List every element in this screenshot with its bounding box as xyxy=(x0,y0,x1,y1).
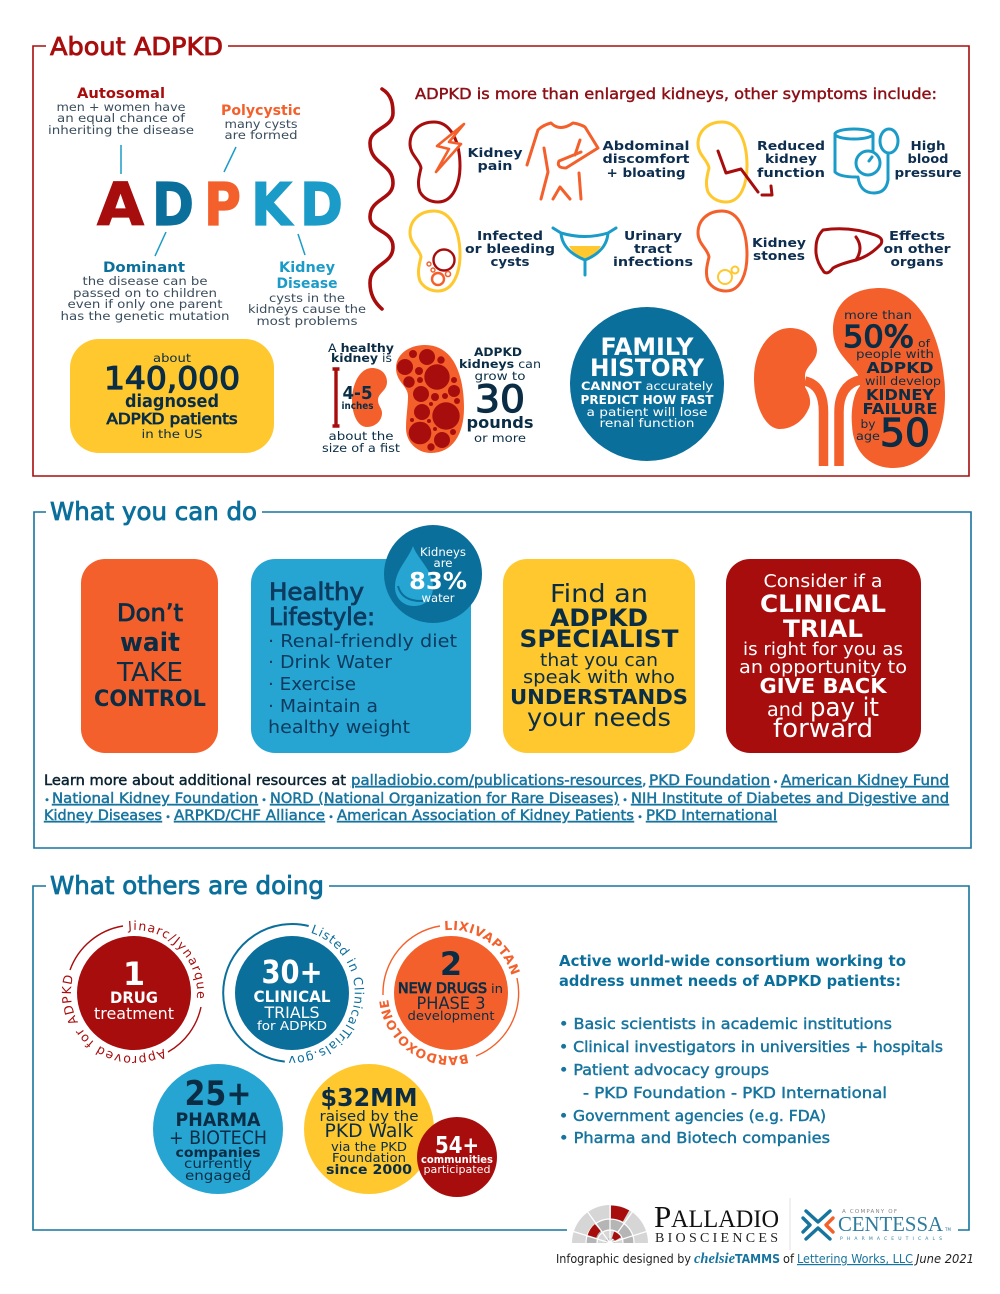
healthy kidney size: kidney is xyxy=(331,351,392,365)
kidneys illustration: 50% failure: KIDNEY xyxy=(866,386,935,404)
logo: Centessa: TM xyxy=(944,1227,951,1232)
label: Kidney stones: Kidney xyxy=(752,235,806,250)
text block: Autosomal: men + women have xyxy=(56,100,186,114)
card: Healthy Lifestyle xyxy=(251,559,471,753)
resource links: PKD International xyxy=(646,808,777,824)
healthy kidney size: size of a fist xyxy=(322,441,401,455)
card: Find an ADPKD specialist: Find an xyxy=(550,579,648,608)
text block: Dominant: Dominant xyxy=(103,260,185,276)
label: Reduced kidney function xyxy=(757,138,825,180)
card: Consider a clinical trial: CLINICAL xyxy=(760,590,886,618)
kidneys illustration: 50% failure: 50 xyxy=(880,411,930,455)
card: Consider a clinical trial: is right for you as xyxy=(743,640,903,660)
icon: abdominal torso xyxy=(527,123,598,199)
card: Find an ADPKD specialist: speak with who xyxy=(523,667,675,688)
badge: 25+ pharma and biotech: 25+ xyxy=(184,1074,252,1114)
resource links xyxy=(44,773,949,824)
text block: Dominant: has the genetic mutation xyxy=(60,309,230,323)
resource links: National Kidney Foundation xyxy=(52,791,258,807)
healthy kidney size xyxy=(322,341,401,455)
badge: 2 new drugs: development xyxy=(408,1008,495,1023)
kidneys illustration: 50% failure: ADPKD xyxy=(866,359,934,377)
badge: 2 new drugs: BARDOXOLONE xyxy=(379,1000,468,1066)
card: Consider a clinical trial: Consider if a xyxy=(764,572,882,592)
label: Effects on other organs: Effects xyxy=(889,228,945,243)
healthy kidney size: A healthy xyxy=(328,341,395,355)
icon: bladder xyxy=(553,228,616,275)
badge: 1 drug treatment xyxy=(62,920,204,1063)
logo: Palladio Biosciences: ALLADIO xyxy=(671,1206,779,1233)
card: Healthy Lifestyle: healthy weight xyxy=(268,717,410,738)
healthy kidney size: inches xyxy=(342,401,374,412)
badge: 30+ clinical trials xyxy=(222,923,364,1063)
card: Find an ADPKD specialist: that you can xyxy=(540,650,658,671)
resource links: American Association of Kidney Patients xyxy=(337,808,634,824)
text: ADPKD kidneys 30 pounds: kidneys can xyxy=(459,357,541,371)
badge: 25+ pharma and biotech: companies xyxy=(176,1146,261,1161)
callout: 140,000 patients: ADPKD patients xyxy=(106,410,238,428)
badge: 30+ clinical trials: CLINICAL xyxy=(254,987,330,1006)
callout: family history xyxy=(570,307,724,461)
card: Don't wait: TAKE xyxy=(116,658,183,688)
badge: kidneys are 83% water: 83% xyxy=(409,569,467,595)
card: Healthy Lifestyle: · Drink Water xyxy=(268,652,393,673)
designer credit: of xyxy=(783,1252,795,1266)
label: Urinary tract infections: infections xyxy=(613,254,693,269)
badge: 2 new drugs: PHASE 3 xyxy=(416,994,486,1014)
label: Kidney pain: Kidney xyxy=(468,145,522,160)
resource links: American Kidney Fund xyxy=(781,773,949,789)
resource links: • xyxy=(261,796,267,806)
callout: family history: FAMILY xyxy=(600,333,694,361)
resource links: • xyxy=(328,813,334,823)
label: Abdominal discomfort + bloating xyxy=(602,138,690,180)
card: Consider a clinical trial xyxy=(726,559,921,753)
designer credit: chelsie xyxy=(694,1251,735,1267)
text block: Dominant: even if only one parent xyxy=(68,297,223,311)
consortium list: - PKD Foundation - PKD International xyxy=(583,1084,887,1102)
text: ADPKD kidneys 30 pounds: or more xyxy=(474,431,526,445)
card: Consider a clinical trial: and xyxy=(767,699,803,721)
badge: kidneys are 83% water: water xyxy=(422,591,455,605)
kidneys illustration: 50% failure: more than xyxy=(844,308,912,322)
label: Effects on other organs: on other xyxy=(884,241,951,256)
badge: 30+ clinical trials: TRIALS xyxy=(264,1003,320,1022)
resource links: NORD (National Organization for Rare Diseases) xyxy=(270,791,619,807)
badge: 54+ communities xyxy=(417,1117,497,1197)
label: Infected or bleeding cysts: cysts xyxy=(490,254,530,269)
label: High blood pressure xyxy=(894,138,962,180)
card: Consider a clinical trial: GIVE BACK xyxy=(760,674,888,698)
callout: 140,000 patients: 140,000 xyxy=(104,361,240,397)
badge: kidneys are 83% water xyxy=(384,525,482,623)
label: Abdominal discomfort + bloating: + bloating xyxy=(606,165,686,180)
card: Healthy Lifestyle: · Exercise xyxy=(268,674,356,695)
designer credit: TAMMS xyxy=(735,1252,780,1266)
heading: What others are doing: What others are doing xyxy=(50,871,324,900)
panel: About ADPKD xyxy=(33,32,969,476)
ADPKD wordmark xyxy=(97,170,343,239)
badge: 30+ clinical trials: 30+ xyxy=(262,953,322,991)
label: Abdominal discomfort + bloating: discomfort xyxy=(602,151,690,166)
kidneys illustration: 50% failure xyxy=(754,288,945,468)
label: Kidney pain xyxy=(468,145,522,173)
badge: $32MM PKD Walk: since 2000 xyxy=(326,1163,412,1178)
kidneys illustration: 50% failure: 50% xyxy=(843,320,914,355)
consortium heading: Active world-wide consortium working to xyxy=(559,952,906,970)
text block: Polycystic: many cysts xyxy=(224,117,298,131)
label: Reduced kidney function: Reduced xyxy=(757,138,825,153)
ADPKD wordmark: A xyxy=(97,170,144,239)
text block: Polycystic: Polycystic xyxy=(221,103,301,119)
icon: kidney pain xyxy=(410,122,464,202)
text: ADPKD kidneys 30 pounds: pounds xyxy=(466,413,534,432)
badge: $32MM PKD Walk: via the PKD xyxy=(331,1139,407,1154)
text block: Autosomal: Autosomal xyxy=(77,86,165,102)
badge: $32MM PKD Walk: PKD Walk xyxy=(324,1120,414,1142)
text block: Dominant: the disease can be xyxy=(82,274,208,288)
badge: $32MM PKD Walk: raised by the xyxy=(320,1109,418,1125)
kidneys illustration: 50% failure: people with xyxy=(856,347,934,361)
resource links: • xyxy=(637,813,643,823)
resource links: • xyxy=(165,813,171,823)
label: Urinary tract infections xyxy=(613,228,693,269)
consortium list: • Government agencies (e.g. FDA) xyxy=(559,1107,826,1125)
badge: $32MM PKD Walk xyxy=(304,1064,434,1194)
badge: 25+ pharma and biotech: currently xyxy=(184,1157,252,1172)
label: Urinary tract infections: Urinary xyxy=(624,228,682,243)
icon: kidney stones xyxy=(698,211,747,291)
logo: Centessa xyxy=(803,1209,951,1242)
designer credit: Lettering Works, LLC xyxy=(797,1252,913,1266)
consortium list: • Clinical investigators in universities + hospitals xyxy=(559,1038,943,1056)
callout: family history: HISTORY xyxy=(590,354,705,382)
card: Healthy Lifestyle: · Renal-friendly diet xyxy=(268,631,457,652)
resource links: PKD Foundation xyxy=(649,773,770,789)
icon: liver xyxy=(816,229,882,273)
text block: Polycystic: are formed xyxy=(224,128,298,142)
text block: Kidney Disease: cysts in the xyxy=(269,291,345,305)
label: Kidney stones: stones xyxy=(753,248,805,263)
label: Infected or bleeding cysts xyxy=(465,228,555,269)
healthy kidney size: about the xyxy=(328,429,394,443)
badge: 25+ pharma and biotech: PHARMA xyxy=(176,1109,261,1131)
label: Infected or bleeding cysts: or bleeding xyxy=(465,241,555,256)
ADPKD wordmark: D xyxy=(152,170,194,239)
badge: kidneys are 83% water: are xyxy=(434,556,452,570)
card: Healthy Lifestyle: Lifestyle: xyxy=(269,603,375,631)
text block: Autosomal: an equal chance of xyxy=(57,111,186,125)
badge: 2 new drugs: LIXIVAPTAN xyxy=(445,920,520,975)
designer credit: Infographic designed by xyxy=(556,1252,691,1266)
label: Abdominal discomfort + bloating: Abdominal xyxy=(602,138,690,153)
callout: 140,000 patients xyxy=(70,339,274,453)
resource links: Kidney Diseases xyxy=(44,808,162,824)
resource links: NIH Institute of Diabetes and Digestive and xyxy=(631,791,949,807)
decorative brace xyxy=(370,89,393,309)
symptoms heading: ADPKD is more than enlarged kidneys, other symptoms include: xyxy=(415,85,937,103)
badge: 1 drug treatment: DRUG xyxy=(110,988,158,1007)
callout: family history: a patient will lose xyxy=(586,405,708,419)
callout: 140,000 patients: about xyxy=(153,351,192,365)
badge: 54+ communities: communities xyxy=(421,1153,493,1166)
label: High blood pressure: pressure xyxy=(894,165,962,180)
resource links: palladiobio.com/publications-resources xyxy=(351,773,642,789)
label: Effects on other organs: organs xyxy=(890,254,944,269)
icon: bleeding cysts xyxy=(410,211,460,291)
label: Kidney stones xyxy=(752,235,806,263)
consortium list xyxy=(559,1015,943,1147)
icon: reduced kidney function xyxy=(698,122,772,202)
card: Healthy Lifestyle: · Maintain a xyxy=(268,696,378,717)
badge: 2 new drugs xyxy=(379,920,520,1066)
label: Urinary tract infections: tract xyxy=(634,241,672,256)
icon: blood pressure cuff xyxy=(835,129,898,193)
badge: 25+ pharma and biotech: engaged xyxy=(185,1169,251,1184)
consortium list: • Basic scientists in academic institutions xyxy=(559,1015,892,1033)
badge: 30+ clinical trials: for ADPKD xyxy=(257,1018,327,1033)
logo: Palladio Biosciences: P xyxy=(654,1199,671,1234)
card: Healthy Lifestyle: Healthy xyxy=(269,578,364,606)
badge: 25+ pharma and biotech xyxy=(153,1064,283,1194)
card: Consider a clinical trial: forward xyxy=(773,714,873,744)
badge: 25+ pharma and biotech: + BIOTECH xyxy=(169,1127,267,1149)
designer credit: June 2021 xyxy=(914,1252,974,1266)
badge: 2 new drugs: in xyxy=(491,982,503,996)
callout: 140,000 patients: diagnosed xyxy=(125,391,219,412)
card: Find an ADPKD specialist: your needs xyxy=(527,703,671,732)
logo: Palladio Biosciences: BIOSCIENCES xyxy=(655,1231,778,1246)
badge: 1 drug treatment: Approved for ADPKD xyxy=(62,976,164,1063)
consortium list: • Patient advocacy groups xyxy=(559,1061,769,1079)
resource links: • xyxy=(44,796,50,806)
text: ADPKD kidneys 30 pounds: 30 xyxy=(475,378,525,421)
panel: What others are doing xyxy=(32,871,970,1231)
consortium heading: address unmet needs of ADPKD patients: xyxy=(559,972,901,990)
label: High blood pressure: blood xyxy=(908,151,948,166)
text block: Kidney Disease: Kidney xyxy=(279,260,336,276)
text block: Kidney Disease: most problems xyxy=(256,314,358,328)
label: Effects on other organs xyxy=(884,228,951,269)
badge: 30+ clinical trials: Listed in ClinicalTrials.gov xyxy=(288,924,364,1063)
kidneys illustration: 50% failure: FAILURE xyxy=(862,400,938,418)
badge: kidneys are 83% water: Kidneys xyxy=(420,545,466,559)
resource links: , xyxy=(642,773,646,789)
logo: Palladio Biosciences xyxy=(572,1199,779,1246)
text block: Dominant xyxy=(60,260,230,323)
badge: 54+ communities: 54+ xyxy=(435,1133,479,1159)
text block: Autosomal xyxy=(48,86,194,137)
ADPKD wordmark: D xyxy=(300,170,343,239)
ADPKD wordmark: P xyxy=(204,170,241,239)
heading: What you can do: What you can do xyxy=(50,497,257,526)
kidneys illustration: 50% failure: age xyxy=(856,429,880,443)
card: Consider a clinical trial: pay it xyxy=(810,693,879,723)
text block: Kidney Disease: kidneys cause the xyxy=(248,302,366,316)
text block: Autosomal: inheriting the disease xyxy=(48,123,194,137)
badge: 54+ communities: participated xyxy=(424,1164,490,1176)
card: Find an ADPKD specialist: ADPKD xyxy=(550,604,648,632)
panel: What you can do xyxy=(34,497,971,848)
logo: Centessa: PHARMACEUTICALS xyxy=(840,1236,942,1242)
label: High blood pressure: High xyxy=(910,138,946,153)
card: Don't wait: Don’t xyxy=(117,599,183,627)
label: Reduced kidney function: kidney xyxy=(765,151,817,166)
text: ADPKD kidneys 30 pounds: grow to xyxy=(474,369,526,383)
resource links: • xyxy=(773,778,778,788)
card: Don't wait xyxy=(81,559,218,753)
text block: Dominant: passed on to children xyxy=(73,286,217,300)
badge: 1 drug treatment: Jinarc/Jynarque xyxy=(128,920,204,998)
card: Find an ADPKD specialist: UNDERSTANDS xyxy=(510,685,688,709)
label: Reduced kidney function: function xyxy=(757,165,825,180)
callout: family history: CANNOT accurately xyxy=(581,379,713,393)
label: Infected or bleeding cysts: Infected xyxy=(477,228,543,243)
card: Consider a clinical trial: an opportunity to xyxy=(739,658,907,678)
kidneys illustration: 50% failure: of xyxy=(918,337,931,350)
heading: About ADPKD: About ADPKD xyxy=(50,32,223,61)
connector lines xyxy=(121,145,305,256)
badge: 2 new drugs: NEW DRUGS xyxy=(398,981,487,997)
logo: Centessa: CENTESSA xyxy=(838,1212,944,1236)
card: Find an ADPKD specialist: SPECIALIST xyxy=(520,625,679,653)
text block: Kidney Disease xyxy=(248,260,366,328)
consortium heading xyxy=(559,952,906,990)
text: ADPKD kidneys 30 pounds: ADPKD xyxy=(474,345,522,359)
logo: Centessa: A COMPANY OF xyxy=(842,1209,897,1215)
designer credit xyxy=(556,1251,974,1267)
callout: family history: PREDICT HOW FAST xyxy=(580,393,714,407)
text: ADPKD kidneys 30 pounds xyxy=(459,345,541,445)
text block: Polycystic xyxy=(221,103,301,142)
card: Consider a clinical trial: TRIAL xyxy=(783,615,863,643)
divider between logos xyxy=(789,1198,791,1250)
badge: 1 drug treatment: 1 xyxy=(123,955,145,993)
badge: $32MM PKD Walk: $32MM xyxy=(320,1083,418,1112)
resource links: ARPKD/CHF Alliance xyxy=(174,808,325,824)
kidneys illustration: 50% failure: will develop xyxy=(865,374,941,388)
resource links: • xyxy=(622,796,628,806)
icon: polycystic kidney xyxy=(396,345,464,453)
resource links: Learn more about additional resources at xyxy=(44,773,347,789)
callout: family history: renal function xyxy=(600,416,694,430)
card: Don't wait: CONTROL xyxy=(94,687,206,712)
badge: 2 new drugs: 2 xyxy=(440,945,462,983)
label: Kidney pain: pain xyxy=(478,158,512,173)
consortium list: • Pharma and Biotech companies xyxy=(559,1129,830,1147)
badge: 1 drug treatment: treatment xyxy=(94,1004,174,1023)
badge: $32MM PKD Walk: Foundation xyxy=(332,1150,406,1165)
text block: Kidney Disease: Disease xyxy=(276,276,338,292)
card: Don't wait: wait xyxy=(120,628,180,658)
callout: 140,000 patients: in the US xyxy=(142,427,202,441)
card: Find an ADPKD specialist xyxy=(503,559,695,753)
healthy kidney size: 4-5 xyxy=(342,383,372,404)
kidneys illustration: 50% failure: by xyxy=(860,417,876,431)
ADPKD wordmark: K xyxy=(251,170,294,239)
